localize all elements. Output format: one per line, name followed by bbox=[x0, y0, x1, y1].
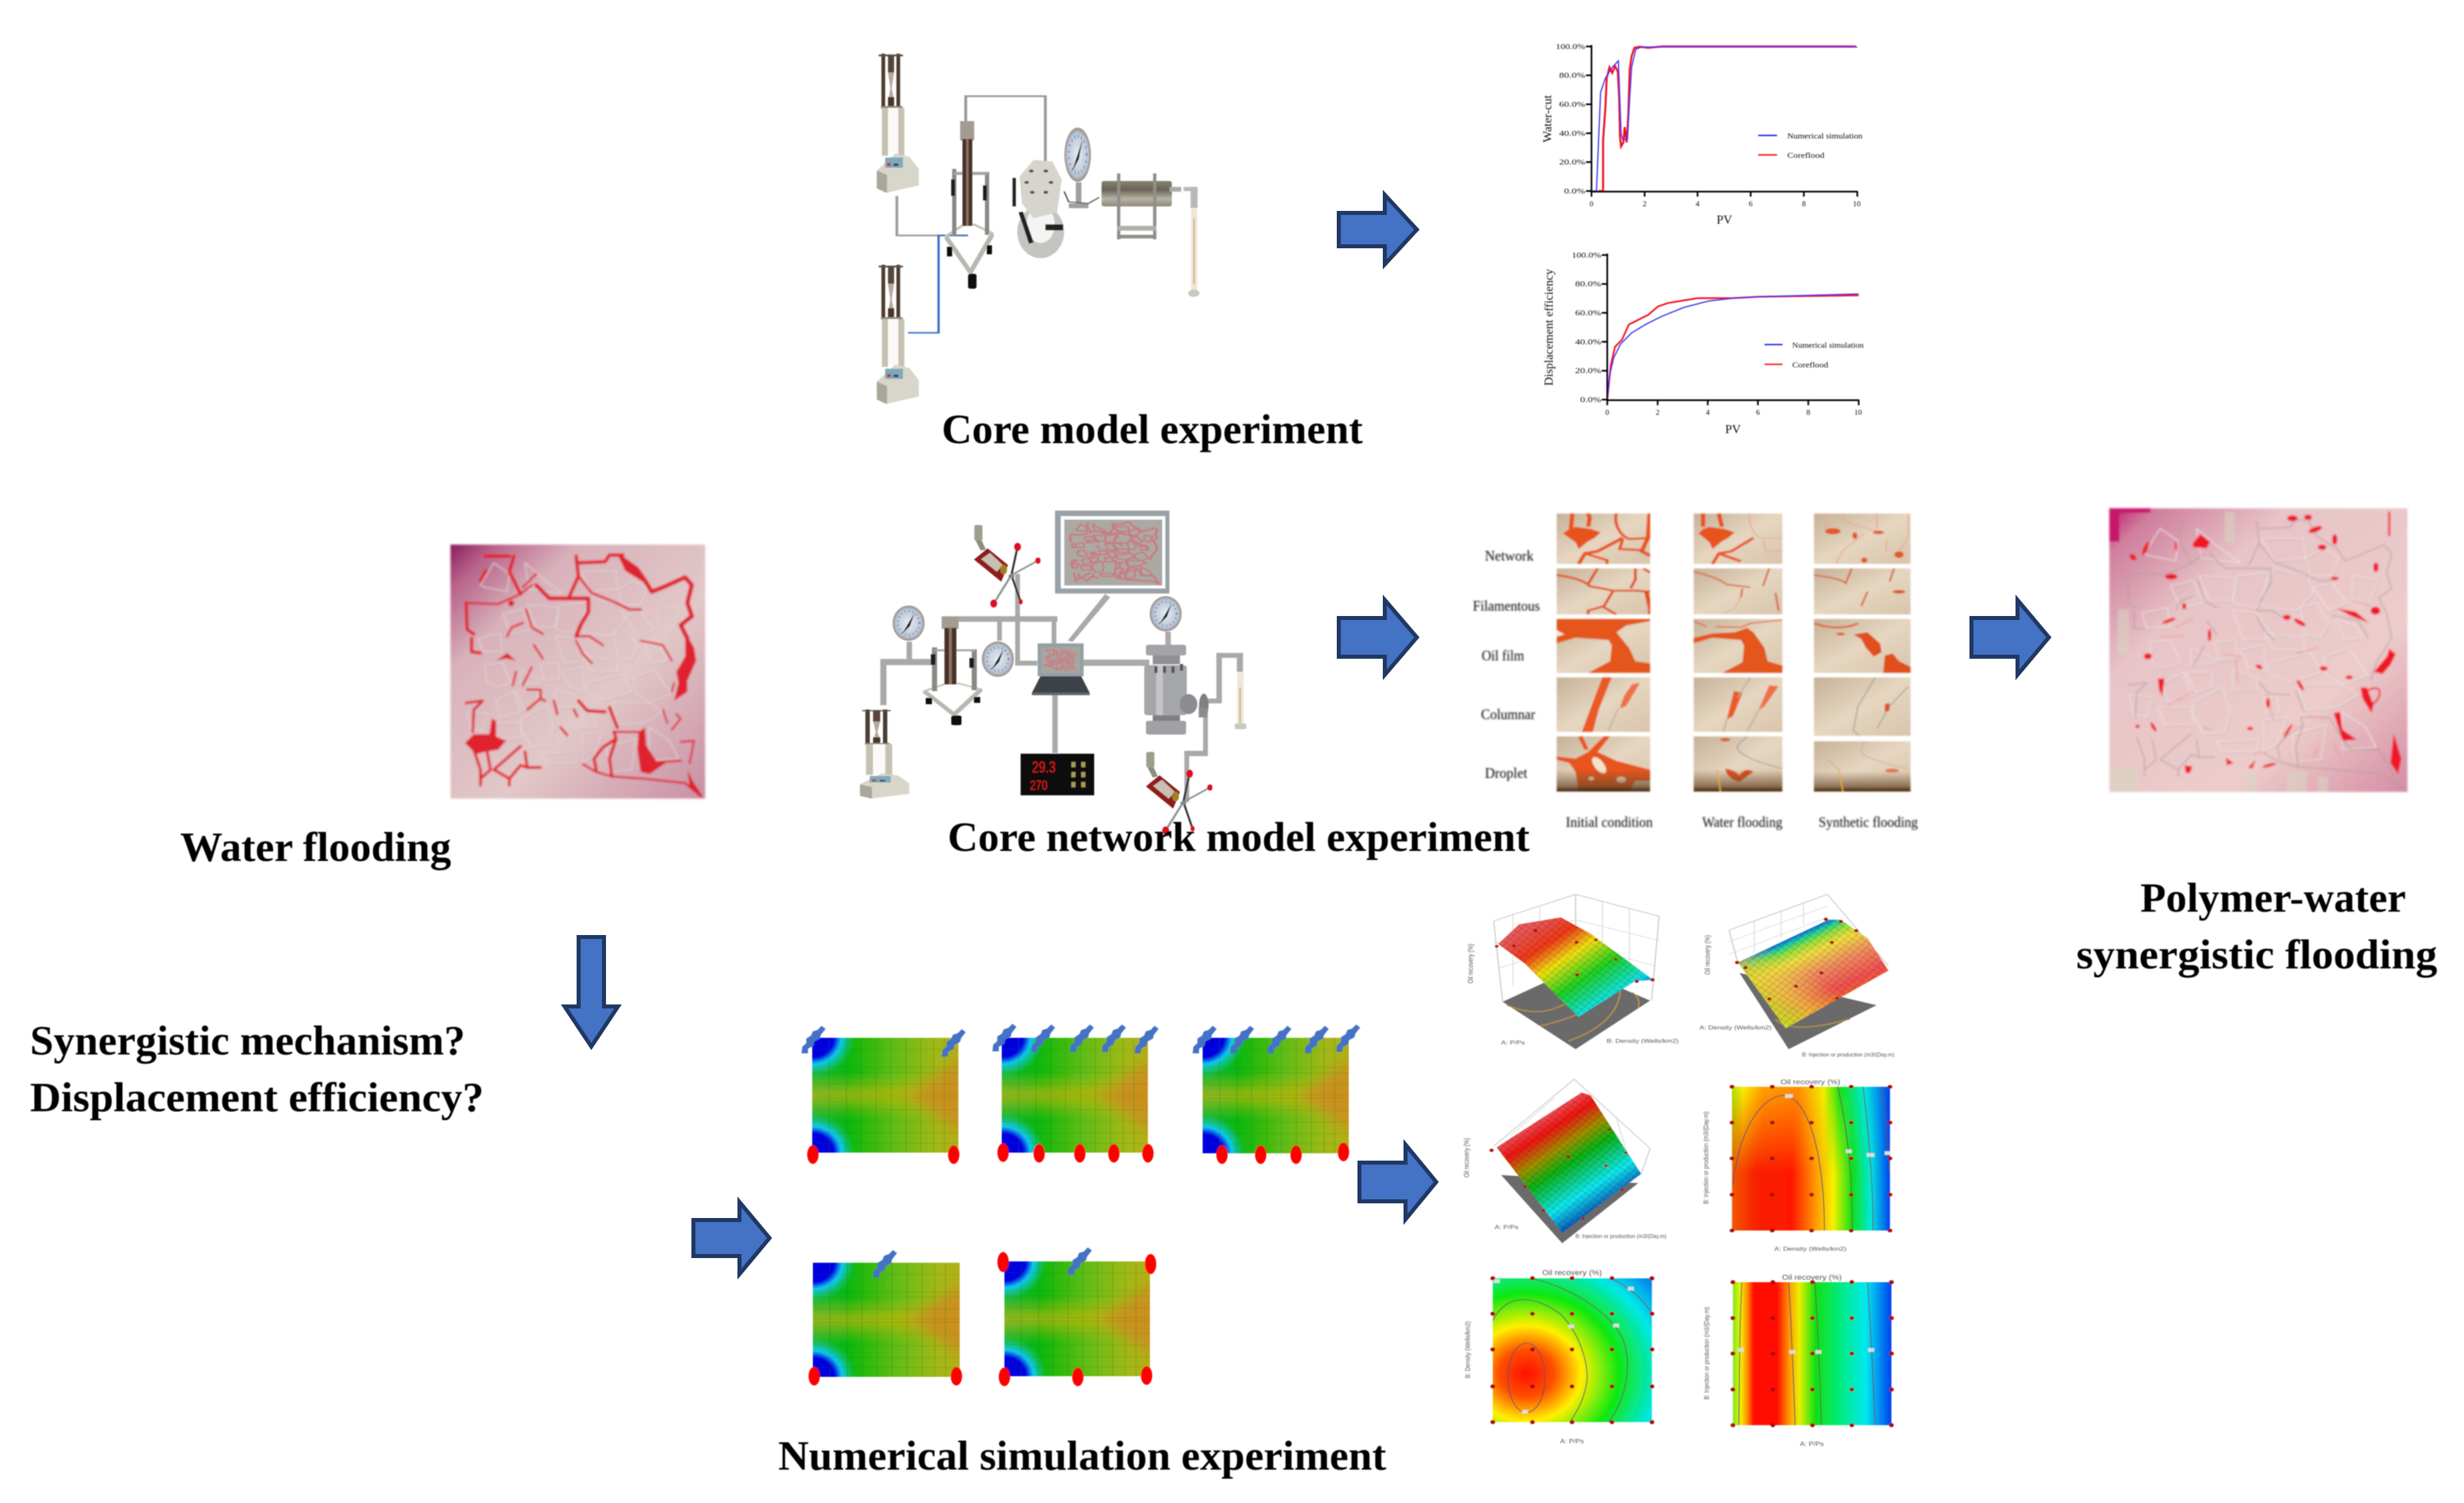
chart: displacement efficiency versus PV: 0 bbox=[1605, 408, 1609, 417]
chart: displacement efficiency versus PV: 0.0% bbox=[1580, 396, 1602, 404]
contour plot: density and injection rate: Oil recovery (%) bbox=[1781, 1079, 1841, 1086]
arrow: photos to synergistic result bbox=[1971, 600, 2049, 675]
contour plot: P/Ps and density: A: P/Ps bbox=[1560, 1438, 1584, 1445]
chart: water cut versus PV: 0.0% bbox=[1564, 187, 1585, 196]
contour plot: P/Ps and density: Oil recovery (%) bbox=[1542, 1269, 1602, 1277]
chart: water cut versus PV: Water-cut bbox=[1541, 95, 1554, 142]
chart: displacement efficiency versus PV: 8 bbox=[1807, 408, 1811, 417]
chart: displacement efficiency versus PV: Displacement efficiency bbox=[1542, 269, 1556, 386]
row: oil film bbox=[1556, 619, 1911, 673]
arrow: core setup to charts bbox=[1339, 195, 1417, 264]
photo: polymer-water synergistic flooding micromodel bbox=[2110, 509, 2407, 792]
map: single injector five producer pattern bbox=[997, 1247, 1161, 1386]
map: five injector pattern bbox=[992, 1024, 1159, 1163]
temperature controller display: 270 bbox=[1030, 778, 1048, 793]
chart: displacement efficiency versus PV: Numerical simulation bbox=[1792, 341, 1864, 350]
chart: water cut versus PV: Coreflood bbox=[1787, 152, 1825, 160]
line: coreflood displacement bbox=[1607, 296, 1859, 400]
temperature controller display bbox=[1020, 754, 1094, 796]
chart: water cut versus PV: 0 bbox=[1590, 200, 1594, 208]
chart: displacement efficiency versus PV bbox=[1542, 251, 1864, 436]
chart: displacement efficiency versus PV: 80.0% bbox=[1575, 280, 1602, 288]
contour plot: P/Ps and injection rate: A: P/Ps bbox=[1800, 1441, 1824, 1448]
photo: water flooding micromodel bbox=[450, 545, 705, 799]
row: network bbox=[1556, 513, 1911, 564]
graduated tube bbox=[1235, 672, 1247, 729]
chart: displacement efficiency versus PV: Coreflood bbox=[1792, 360, 1829, 369]
map: single injector two producer pattern bbox=[809, 1250, 971, 1386]
arrow: maps to response surfaces bbox=[1359, 1145, 1436, 1219]
title: core model experiment: Core model experiment bbox=[942, 407, 1363, 453]
row labels: Droplet bbox=[1485, 765, 1528, 782]
surface plot: P/Ps and injection rate: B: Injection or production (m3/(Day.m) bbox=[1576, 1233, 1666, 1240]
title: core network model experiment: Core network model experiment bbox=[948, 815, 1530, 860]
chart: displacement efficiency versus PV: 100.0% bbox=[1572, 251, 1602, 260]
row labels: Network bbox=[1485, 547, 1534, 565]
line: simulated water cut bbox=[1592, 47, 1857, 191]
line: coreflood water cut bbox=[1598, 47, 1856, 191]
chart: water cut versus PV: 6 bbox=[1749, 200, 1753, 208]
column labels: Synthetic flooding bbox=[1819, 814, 1918, 831]
schematic: core network apparatus bbox=[860, 511, 1247, 834]
title: polymer-water synergistic flooding: synergistic flooding bbox=[2076, 932, 2437, 978]
surface plot: density and injection rate: A: Density (Wells/km2) bbox=[1700, 1025, 1772, 1031]
row: droplet bbox=[1556, 736, 1911, 792]
row labels: Columnar bbox=[1481, 706, 1535, 723]
title: water flooding: Water flooding bbox=[180, 825, 451, 870]
surface plot: A and B density: Oil recovery (%) bbox=[1467, 944, 1475, 984]
surface plot: density and injection rate bbox=[1700, 894, 1895, 1059]
chart: displacement efficiency versus PV: PV bbox=[1725, 422, 1741, 436]
arrow: questions to simulation bbox=[693, 1202, 769, 1274]
panel: residual oil photo grid bbox=[1473, 513, 1918, 831]
title: numerical simulation experiment: Numerical simulation experiment bbox=[778, 1434, 1386, 1479]
chart: water cut versus PV: PV bbox=[1717, 213, 1732, 226]
question: synergistic mechanism and displacement efficiency: Synergistic mechanism? bbox=[30, 1018, 465, 1064]
chart: displacement efficiency versus PV: 4 bbox=[1706, 408, 1710, 417]
surface plot: density and injection rate: Oil recovery (%) bbox=[1704, 935, 1712, 974]
chart: water cut versus PV: 10 bbox=[1853, 200, 1861, 208]
chart: water cut versus PV: Numerical simulation bbox=[1787, 131, 1863, 141]
contour plot: P/Ps and density: B: Density (Wells/km2) bbox=[1464, 1321, 1472, 1378]
line: simulated displacement bbox=[1607, 294, 1859, 400]
chart: water cut versus PV: 80.0% bbox=[1559, 71, 1585, 80]
surface plot: A and B density: A: P/Ps bbox=[1501, 1040, 1525, 1046]
chart: water cut versus PV bbox=[1541, 42, 1863, 226]
contour plot: P/Ps and injection rate bbox=[1703, 1273, 1894, 1448]
chart: water cut versus PV: 40.0% bbox=[1559, 129, 1585, 137]
surface plot: P/Ps and injection rate bbox=[1463, 1079, 1666, 1243]
row: columnar bbox=[1556, 677, 1911, 736]
chart: displacement efficiency versus PV: 20.0% bbox=[1575, 366, 1602, 375]
map: two injector pattern bbox=[802, 1026, 970, 1164]
chart: water cut versus PV: 4 bbox=[1696, 200, 1700, 208]
chart: displacement efficiency versus PV: 6 bbox=[1756, 408, 1760, 417]
chart: displacement efficiency versus PV: 60.0% bbox=[1575, 309, 1602, 318]
column labels bbox=[1566, 814, 1918, 831]
temperature controller display: 29.3 bbox=[1032, 758, 1056, 776]
row labels bbox=[1473, 547, 1540, 782]
chart: water cut versus PV: 100.0% bbox=[1556, 42, 1585, 51]
contour plot: P/Ps and density bbox=[1464, 1269, 1654, 1445]
surface plot: P/Ps and injection rate: A: P/Ps bbox=[1494, 1224, 1518, 1231]
row labels: Oil film bbox=[1482, 647, 1524, 664]
chart: water cut versus PV: 20.0% bbox=[1559, 158, 1585, 167]
schematic: core flooding apparatus bbox=[877, 53, 1199, 404]
contour plot: density and injection rate bbox=[1703, 1079, 1892, 1252]
contour plot: density and injection rate: B: Injection or production (m3/(Day.m) bbox=[1703, 1111, 1710, 1204]
column labels: Water flooding bbox=[1702, 814, 1783, 831]
panel: numerical simulation well pattern maps bbox=[802, 1024, 1360, 1386]
contour plot: P/Ps and injection rate: Oil recovery (%) bbox=[1782, 1273, 1842, 1281]
surface plot: P/Ps and injection rate: Oil recovery (%) bbox=[1463, 1138, 1471, 1177]
map: five injector four producer pattern bbox=[1193, 1024, 1360, 1164]
row labels: Filamentous bbox=[1473, 597, 1540, 615]
surface plot: density and injection rate: B: Injection or production (m3/(Day.m) bbox=[1802, 1052, 1895, 1059]
arrow: water flooding downward bbox=[565, 937, 618, 1046]
chart: water cut versus PV: 2 bbox=[1642, 200, 1646, 208]
laptop with micromodel image bbox=[1032, 643, 1090, 695]
contour plot: density and injection rate: A: Density (Wells/km2) bbox=[1775, 1246, 1847, 1252]
surface plot: A and B density: B: Density (Wells/km2) bbox=[1606, 1038, 1678, 1044]
question: synergistic mechanism and displacement efficiency: Displacement efficiency? bbox=[30, 1075, 484, 1121]
monitor with micromodel image bbox=[1055, 511, 1169, 593]
chart: water cut versus PV: 8 bbox=[1802, 200, 1806, 208]
arrow: network setup to oil photos bbox=[1339, 600, 1417, 675]
chart: displacement efficiency versus PV: 2 bbox=[1656, 408, 1660, 417]
chart: displacement efficiency versus PV: 10 bbox=[1854, 408, 1862, 417]
contour plot: P/Ps and injection rate: B: Injection or production (m3/(Day.m) bbox=[1703, 1307, 1711, 1400]
chart: displacement efficiency versus PV: 40.0% bbox=[1575, 338, 1602, 346]
row: filamentous bbox=[1556, 569, 1911, 615]
panel: response surface plots bbox=[1463, 894, 1895, 1448]
title: polymer-water synergistic flooding: Polymer-water bbox=[2140, 876, 2406, 921]
column labels: Initial condition bbox=[1566, 814, 1652, 831]
surface plot: A and B density bbox=[1467, 894, 1678, 1049]
pressure vessel bbox=[1144, 645, 1209, 735]
chart: water cut versus PV: 60.0% bbox=[1559, 100, 1585, 109]
